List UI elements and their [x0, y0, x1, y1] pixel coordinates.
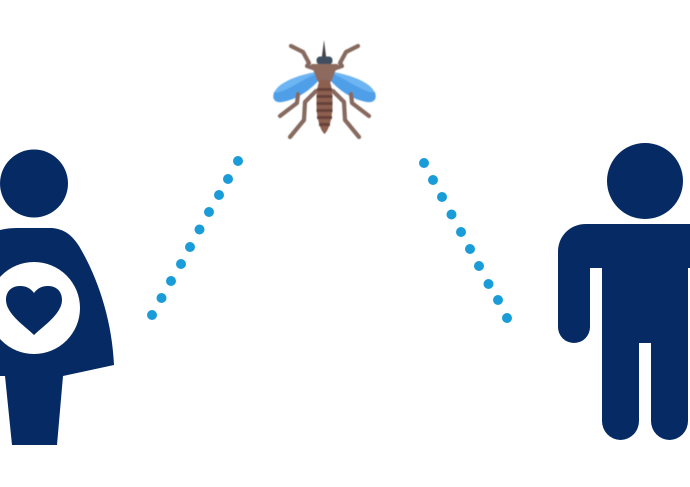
wings — [273, 72, 319, 102]
eyes — [316, 56, 332, 64]
icon: man — [558, 143, 690, 440]
icon: mosquito — [273, 40, 376, 137]
legs — [280, 46, 369, 137]
proboscis — [322, 40, 326, 60]
icon: pregnant woman — [0, 150, 114, 445]
dotted line: left — [147, 156, 243, 320]
abdomen — [316, 80, 332, 134]
dotted line: right — [419, 158, 512, 323]
thorax — [311, 64, 338, 84]
